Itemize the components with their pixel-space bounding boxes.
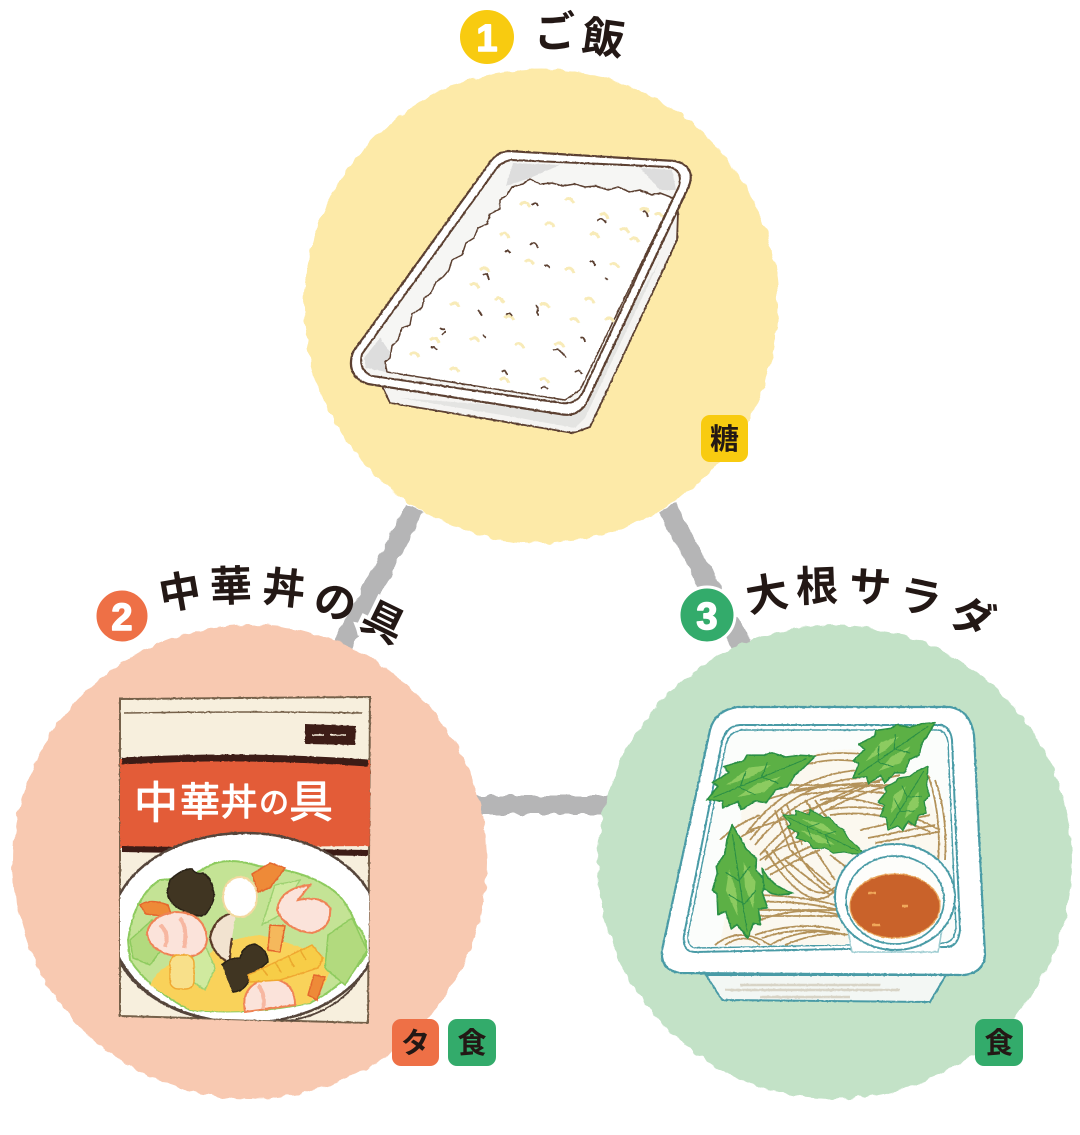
heading: 2 toppings: 具 <box>354 592 412 653</box>
heading: 2 toppings: の <box>308 574 362 631</box>
bag title <box>134 778 333 828</box>
rice mass <box>385 179 673 400</box>
heading: 3 salad: ラ <box>895 570 946 625</box>
carrots <box>252 863 285 892</box>
tag: carbohydrate <box>701 415 748 462</box>
egg <box>223 877 257 917</box>
heading: 3 salad: 根 <box>795 562 839 611</box>
tray inner shading <box>364 163 676 372</box>
tag: fiber on salad <box>975 1019 1023 1066</box>
heading: 2 toppings: 華 <box>209 562 253 611</box>
heading: 3 salad <box>679 562 1001 648</box>
heading: 2 toppings: 中 <box>155 566 205 619</box>
lettuce and soup <box>128 861 366 1011</box>
sauce cup <box>848 930 942 952</box>
bag label <box>305 724 356 745</box>
heading: 2 toppings <box>95 562 412 653</box>
bowl <box>111 833 379 1023</box>
heading: 1 rice: ご <box>533 8 577 57</box>
tag: fiber on toppings <box>448 1019 496 1066</box>
tag: protein: タ <box>401 1027 430 1060</box>
heading: 3 salad: 3 <box>696 596 718 638</box>
shrimp <box>147 912 207 957</box>
panel: toppings circle <box>13 625 487 1099</box>
tag: carbohydrate: 糖 <box>710 423 739 456</box>
heading: 3 salad: サ <box>847 563 893 612</box>
tag: fiber on toppings: 食 <box>457 1027 487 1060</box>
bag title: 中 <box>134 779 178 828</box>
mushrooms <box>167 869 214 916</box>
panel: rice circle <box>304 69 778 543</box>
illustration: toppings packet <box>111 697 379 1023</box>
heading: 2 toppings: 2 <box>111 597 133 639</box>
rice grains <box>410 199 663 383</box>
heading: 1 rice <box>460 8 627 65</box>
leaves <box>697 732 825 823</box>
illustration: salad tray <box>662 701 985 1002</box>
corn <box>248 945 323 982</box>
tag: protein <box>392 1019 439 1066</box>
panel: salad circle <box>598 625 1072 1099</box>
bag title: 丼 <box>220 782 258 823</box>
bag title: 華 <box>180 781 220 825</box>
heading: 1 rice: 飯 <box>579 12 627 65</box>
bag title: の <box>259 787 289 820</box>
bag title: 具 <box>289 778 333 827</box>
heading: 3 salad: 大 <box>742 568 792 621</box>
illustration: rice tray <box>351 151 691 433</box>
heading: 1 rice: 1 <box>476 18 498 60</box>
connector lines <box>342 508 742 805</box>
tag: fiber on salad: 食 <box>984 1027 1014 1060</box>
heading: 3 salad: ダ <box>943 588 1001 648</box>
noodles <box>720 750 945 945</box>
heading: 2 toppings: 丼 <box>261 563 307 614</box>
